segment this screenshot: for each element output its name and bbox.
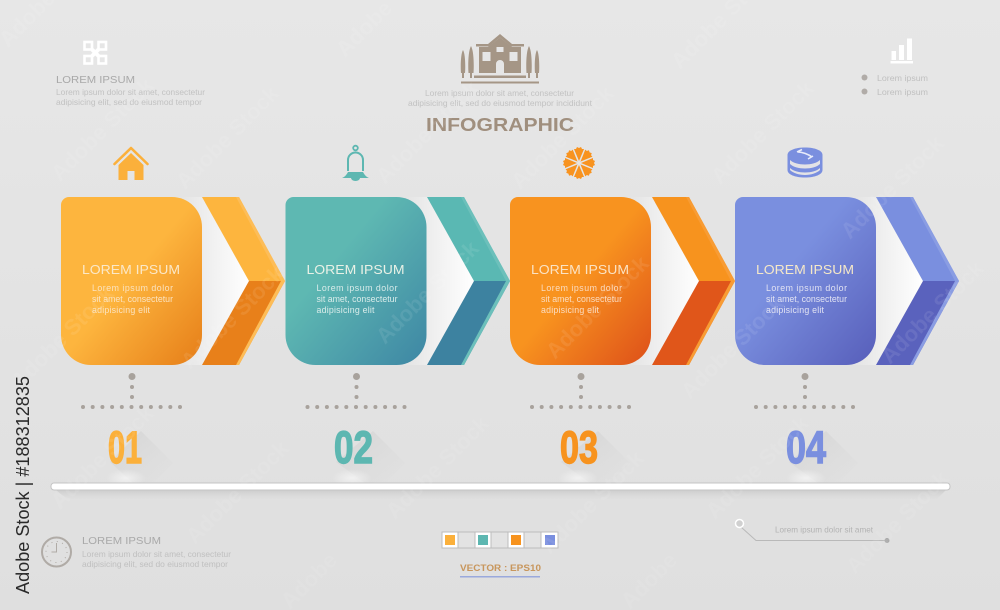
watermarks: Adobe Stock (536, 445, 649, 559)
top-right block (862, 38, 928, 97)
dotted connector 4 (754, 373, 855, 409)
white arrow backing (405, 197, 474, 365)
text block (408, 88, 593, 108)
number 02: 02 (334, 422, 373, 473)
bottom-left block (42, 535, 231, 569)
title: INFOGRAPHIC (426, 114, 574, 135)
legend: Lorem ipsum (877, 87, 928, 97)
watermarks: Adobe Stock (841, 465, 954, 579)
number 04: 04 (786, 422, 826, 473)
card text (92, 283, 173, 315)
number 03 (558, 422, 630, 487)
card heading: LOREM IPSUM (531, 262, 629, 277)
white arrow backing (180, 197, 249, 365)
panel: step 4 (735, 197, 959, 365)
card text: adipisicing elit (316, 305, 375, 315)
card (510, 197, 651, 365)
white arrow backing (630, 197, 699, 365)
number 04 (786, 422, 858, 487)
watermarks: Adobe Stock (541, 250, 654, 364)
number 01: 01 (108, 422, 142, 473)
watermarks: Adobe Stock (706, 75, 819, 189)
watermarks: Adobe Stock (176, 260, 289, 374)
watermarks: Adobe Stock (181, 435, 294, 549)
watermarks: Adobe Stock (46, 400, 159, 514)
panel: step 1 (61, 197, 285, 365)
icon: flower (563, 147, 595, 179)
watermarks: Adobe Stock (506, 80, 619, 194)
card text: Lorem ipsum dolor (92, 283, 173, 293)
card text: sit amet, consectetur (766, 294, 847, 304)
card text (316, 283, 398, 315)
card (61, 197, 202, 365)
card text: Lorem ipsum dolor (541, 283, 622, 293)
watermarks: Adobe Stock (381, 410, 494, 524)
icon: bell (342, 146, 369, 181)
top-left block (56, 42, 205, 107)
card text (541, 283, 622, 315)
panel: step 2 (286, 197, 510, 365)
vertical credit text: Adobe Stock | #188312835 (13, 376, 33, 594)
number 01 (106, 422, 173, 487)
number 02 (332, 422, 405, 487)
watermarks: Adobe Stock (676, 290, 789, 404)
card text: Lorem ipsum dolor (766, 283, 847, 293)
card text: adipisicing elit (92, 305, 151, 315)
watermarks: Adobe Stock (701, 410, 814, 524)
icon: clock (42, 538, 71, 566)
card heading: LOREM IPSUM (82, 262, 180, 277)
watermarks: Adobe Stock (836, 130, 949, 244)
icon: house (114, 148, 148, 180)
top-center block (408, 34, 593, 135)
text block: adipisicing elit, sed do eiusmod tempor incididunt (408, 98, 593, 108)
card text: adipisicing elit (766, 305, 825, 315)
text block: Lorem ipsum dolor sit amet, consectetur (56, 87, 205, 97)
white arrow backing (854, 197, 923, 365)
text block (82, 549, 231, 569)
arrow (427, 197, 510, 365)
card text: sit amet, consectetur (541, 294, 622, 304)
card text: sit amet, consectetur (316, 294, 398, 304)
watermarks: Adobe Stock (371, 75, 484, 189)
card text: sit amet, consectetur (92, 294, 173, 304)
card text: Lorem ipsum dolor (316, 283, 398, 293)
dotted connector 2 (306, 373, 406, 409)
heading: lorem ipsum: LOREM IPSUM (56, 74, 135, 86)
watermarks: Adobe Stock (171, 80, 284, 194)
vector label: VECTOR : EPS10 (460, 563, 541, 574)
panel: step 3 (510, 197, 735, 365)
dotted connector 3 (530, 373, 631, 409)
card (735, 197, 876, 365)
timeline bar (51, 483, 950, 500)
bottom-right callout (736, 520, 890, 543)
card text (766, 283, 847, 315)
text block: Lorem ipsum dolor sit amet, consectetur (82, 549, 231, 559)
icon: bar chart (890, 38, 913, 64)
watermarks: Adobe Stock (46, 72, 159, 186)
arrow (652, 197, 735, 365)
colour swatch legend (442, 532, 558, 548)
text block: adipisicing elit, sed do eiusmod tempor (56, 97, 202, 107)
icon: coin stack (788, 148, 822, 178)
legend: Lorem ipsum (877, 73, 928, 83)
bottom-right callout: Lorem ipsum dolor sit amet (775, 524, 874, 534)
card heading: LOREM IPSUM (306, 262, 404, 277)
number 03: 03 (560, 422, 598, 473)
heading: lorem ipsum: LOREM IPSUM (82, 535, 161, 547)
watermarks: Adobe Stock (876, 255, 989, 369)
icon: building with trees (461, 34, 539, 84)
card (286, 197, 426, 365)
watermarks: Adobe Stock (371, 235, 484, 349)
legend (862, 73, 928, 97)
icon: squares network (84, 42, 106, 64)
dotted connector 1 (81, 373, 182, 409)
card heading: LOREM IPSUM (756, 262, 854, 277)
watermarks: Adobe Stock (6, 280, 119, 394)
text block: adipisicing elit, sed do eiusmod tempor (82, 559, 228, 569)
card text: adipisicing elit (541, 305, 600, 315)
arrow (202, 197, 285, 365)
arrow (876, 197, 959, 365)
text block: Lorem ipsum dolor sit amet, consectetur (425, 88, 574, 98)
text block (56, 87, 205, 107)
